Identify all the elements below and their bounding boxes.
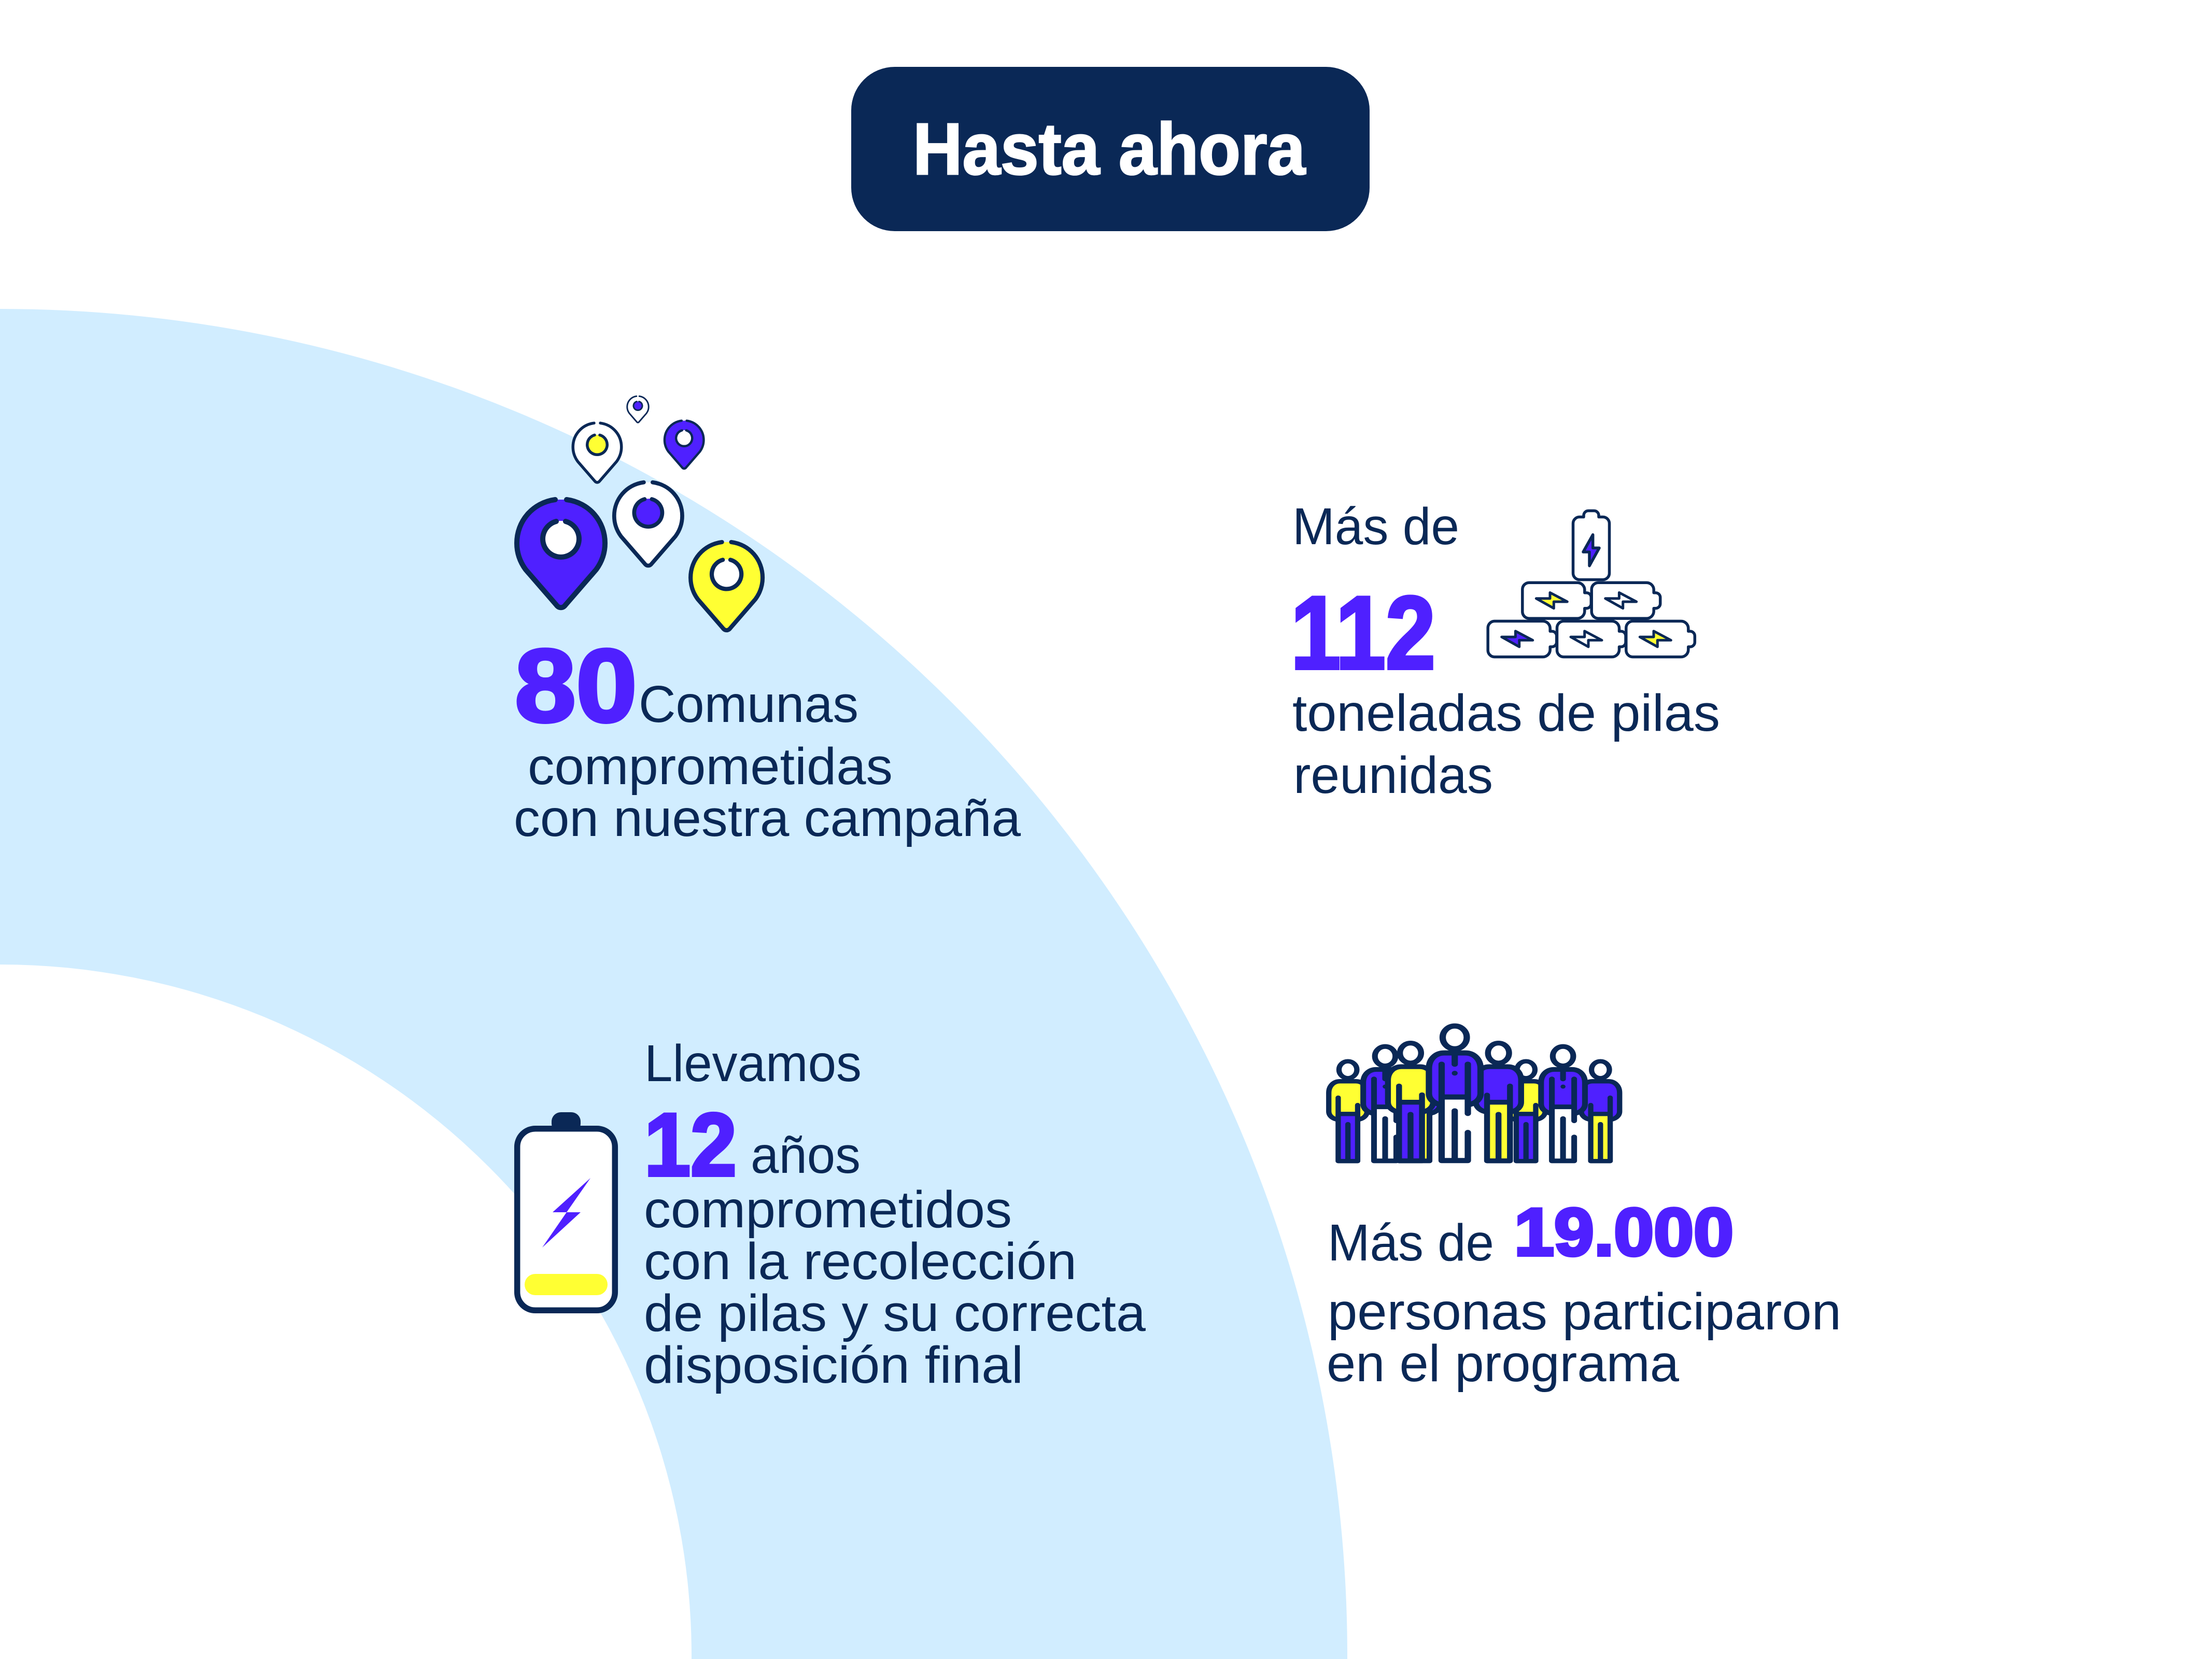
pin: small purple [665, 421, 703, 469]
text block: 19.000 personas: en el programa [1327, 1335, 1679, 1393]
text block: 80 comunas: con nuestra campaña [514, 789, 1021, 847]
text block: 19.000 personas: Más de [1328, 1214, 1494, 1272]
battery: bottom row middle [1557, 621, 1626, 657]
text block: 112 toneladas: toneladas de pilas [1292, 684, 1720, 742]
battery: bottom row right [1626, 621, 1695, 657]
text block: 112 toneladas [1291, 498, 1720, 804]
text block: 12 años: años [751, 1126, 861, 1184]
pin: yellow [691, 542, 763, 630]
person: yellow shirt, purple trousers [1388, 1043, 1433, 1161]
text block: 80 comunas: comprometidas [528, 738, 893, 796]
text block: 19.000 personas [1327, 1194, 1841, 1393]
text block: 19.000 personas: 19.000 [1514, 1194, 1734, 1270]
text block: 12 años [644, 1034, 1146, 1394]
text block: 12 años: comprometidos [644, 1181, 1012, 1239]
text block: 112 toneladas: Más de [1292, 498, 1459, 556]
text block: 12 años: con la recolección [644, 1232, 1077, 1291]
person: medium, collar shirt, white trousers [1363, 1046, 1407, 1161]
person: purple shirt, yellow trousers [1476, 1043, 1521, 1161]
person: short, yellow shirt behind [1507, 1061, 1545, 1161]
battery: middle row right [1591, 583, 1660, 618]
battery: upright [1573, 511, 1609, 579]
person: hidden figure behind [1397, 1069, 1440, 1161]
person: tall central figure [1429, 1026, 1481, 1161]
text block: 112 toneladas: 112 [1291, 575, 1435, 691]
pin: tiny white [627, 396, 649, 422]
icon: crowd of people [1329, 1026, 1619, 1161]
text block: 112 toneladas: reunidas [1293, 746, 1493, 804]
person: short, yellow shirt [1329, 1061, 1367, 1161]
pin: large purple [517, 500, 605, 607]
title badge: Hasta ahora [913, 108, 1306, 190]
text block: 12 años: 12 [644, 1095, 737, 1195]
person: medium, collar shirt, white trousers, right [1541, 1046, 1585, 1161]
icon: large battery [517, 1112, 615, 1310]
text block: 80 comunas: Comunas [639, 675, 858, 733]
background arc [0, 309, 1347, 1659]
icon: stack of batteries [1488, 511, 1695, 657]
battery: bottom row left [1488, 621, 1557, 657]
text block: 12 años: disposición final [644, 1336, 1023, 1394]
pin: small white with yellow [573, 423, 622, 483]
icon: map pins [517, 396, 763, 630]
pin: medium white [614, 483, 682, 565]
text block: 80 comunas: 80 [515, 628, 637, 744]
person: short, purple shirt [1581, 1061, 1619, 1161]
battery: middle row left [1523, 583, 1591, 618]
text block: 12 años: de pilas y su correcta [644, 1284, 1146, 1342]
text block: 19.000 personas: personas participaron [1328, 1283, 1841, 1341]
text block: 80 comunas [514, 628, 1021, 847]
text block: 12 años: Llevamos [644, 1034, 862, 1093]
title badge [851, 67, 1370, 231]
